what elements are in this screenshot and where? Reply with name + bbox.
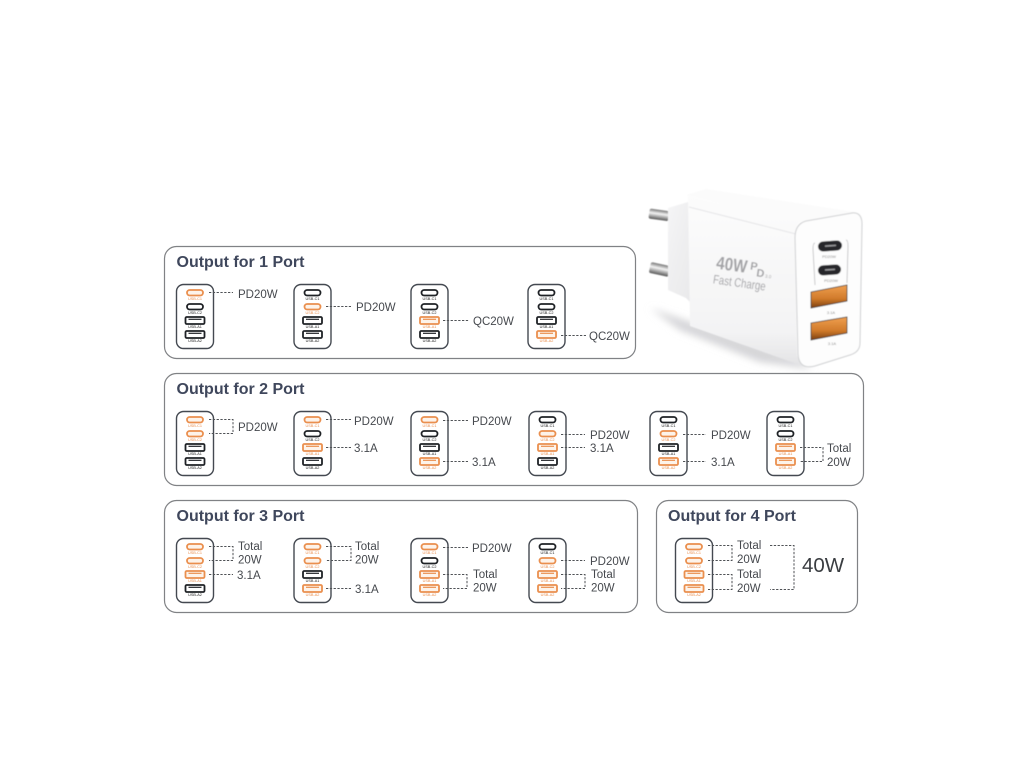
label: QC20W: [473, 316, 514, 328]
charger printed logo: [712, 253, 774, 294]
device: C1 A1 A2 active: USB-A1: [423, 579, 436, 583]
device: USB-C2 active: USB-A1: [306, 325, 319, 329]
device: C1 and C2 active: USB-A2: [188, 466, 202, 470]
connector: [443, 546, 468, 548]
connector: [326, 306, 351, 308]
charger crease: [689, 207, 796, 234]
panel: output for 3 port: [164, 500, 638, 612]
label: PD20W: [354, 416, 394, 428]
heading: Output for 1 Port: [176, 254, 305, 271]
device: USB-A2 active: USB-C1: [540, 297, 553, 301]
device: C1 and A2 active: USB-C1: [423, 424, 436, 428]
device: USB-C1 active: USB-C2: [188, 311, 202, 315]
label: 20W: [355, 554, 379, 566]
device: A1 and A2 active: USB-A1: [779, 452, 792, 456]
device: USB-A2 active: USB-A1: [540, 325, 553, 329]
charger pins: [648, 209, 671, 277]
device: A1 and A2 active: [767, 412, 804, 476]
bracket: [209, 546, 233, 560]
device: C1 C2 A1 active: [176, 538, 214, 602]
charger front face: [795, 213, 862, 367]
charger side face: [688, 196, 806, 367]
panel outline: [656, 500, 858, 612]
panel outline: [164, 500, 638, 612]
device: USB-C1 active: USB-C1: [188, 297, 202, 301]
label: PD20W: [590, 556, 630, 568]
label: Total: [355, 541, 379, 553]
device: USB-C2 active: USB-C2: [306, 311, 319, 315]
label: 20W: [473, 582, 497, 594]
device: C2 and A2 active: USB-C1: [662, 424, 675, 428]
device: C1 and A1 active: USB-A1: [306, 452, 319, 456]
charger product photo: [648, 189, 862, 369]
device: all ports active: [676, 538, 712, 602]
device: C1 and A2 active: USB-A1: [423, 452, 436, 456]
label: 3.1A: [590, 443, 614, 455]
device: C1 and A2 active: USB-C2: [423, 438, 436, 442]
device: all ports active: USB-A2: [687, 593, 701, 597]
device: C2 and A2 active: USB-A2: [662, 466, 675, 470]
label: Total: [238, 541, 262, 553]
device: C1 and A2 active: [411, 412, 448, 476]
connector: [443, 320, 469, 322]
device: USB-C2 active: [294, 284, 331, 348]
label: PD20W: [472, 543, 512, 555]
charger front ports: PD20W: [822, 254, 836, 259]
label: 3.1A: [354, 443, 378, 455]
label: 20W: [737, 583, 761, 595]
total bracket: [770, 546, 794, 590]
device: C2 A1 A2 active: USB-A1: [541, 579, 554, 583]
device: C1 C2 A1 active: USB-A2: [188, 593, 202, 597]
device: USB-C1 active: USB-A2: [188, 339, 202, 343]
total value: 40W: [802, 554, 845, 577]
charger printed logo: D: [756, 267, 765, 280]
device: C1 C2 A1 active: USB-C2: [188, 565, 202, 569]
device: C1 and A1 active: [294, 412, 331, 476]
panel: output for 2 port: [164, 374, 864, 486]
bracket: [708, 574, 732, 590]
label: 20W: [827, 457, 851, 469]
device: USB-A2 active: [528, 284, 565, 348]
label: Total: [737, 540, 761, 552]
device: USB-C2 active: USB-A2: [306, 339, 319, 343]
device: C1 A1 A2 active: USB-C1: [423, 551, 436, 555]
device: C2 and A2 active: USB-A1: [662, 452, 675, 456]
label: PD20W: [590, 430, 630, 442]
device: C2 A1 A2 active: [529, 538, 566, 602]
label: Total: [591, 569, 615, 581]
heading: Output for 3 Port: [176, 508, 305, 525]
device: C2 and A1 active: USB-C2: [541, 438, 554, 442]
device: C2 A1 A2 active: USB-A2: [541, 593, 554, 597]
device: C1 C2 A1 active: USB-C1: [188, 551, 202, 555]
device: all ports active: USB-A1: [687, 579, 701, 583]
panel: output for 4 port: [656, 500, 858, 612]
device: C2 and A2 active: USB-C2: [662, 438, 675, 442]
charger back plate: [668, 202, 700, 312]
device: C1 C2 A2 active: [294, 538, 331, 602]
device: C1 and A2 active: USB-A2: [423, 466, 436, 470]
charger top face: [686, 189, 855, 222]
connector: [209, 574, 233, 576]
label: 20W: [591, 582, 615, 594]
charger front ports: PD20W: [824, 278, 838, 283]
connector: [561, 560, 585, 562]
charger printed logo: Fast Charge: [712, 272, 767, 294]
charger front ports: 3.1A: [828, 341, 836, 346]
device: C2 and A1 active: [529, 412, 566, 476]
charger shadow: [650, 308, 812, 369]
device: C1 and C2 active: USB-C2: [188, 438, 202, 442]
label: QC20W: [589, 331, 630, 343]
device: C2 and A1 active: USB-C1: [541, 424, 554, 428]
label: PD20W: [356, 302, 396, 314]
connector: [326, 588, 351, 590]
label: 3.1A: [711, 457, 735, 469]
device: A1 and A2 active: USB-C1: [779, 424, 792, 428]
device: USB-A2 active: USB-C2: [540, 311, 553, 315]
device: A1 and A2 active: USB-C2: [779, 438, 792, 442]
charger printed logo: 40W: [715, 253, 749, 277]
device: C1 and A1 active: USB-A2: [306, 466, 319, 470]
device: C2 and A1 active: USB-A1: [541, 452, 554, 456]
label: 3.1A: [237, 570, 261, 582]
device: USB-A2 active: USB-A2: [540, 339, 553, 343]
device: C2 A1 A2 active: USB-C2: [541, 565, 554, 569]
device: C1 and A1 active: USB-C1: [306, 424, 319, 428]
label: 3.1A: [355, 584, 379, 596]
device: C1 A1 A2 active: [411, 538, 448, 602]
device: C1 A1 A2 active: USB-A2: [423, 593, 436, 597]
connectors: [443, 420, 468, 462]
device: C1 and A1 active: USB-C2: [306, 438, 319, 442]
bracket: [708, 546, 732, 560]
device: C1 and C2 active: [176, 412, 214, 476]
device: USB-A1 active: USB-C2: [423, 311, 436, 315]
connectors: [561, 434, 585, 448]
device: C1 and C2 active: USB-C1: [188, 424, 202, 428]
device: USB-A1 active: [411, 284, 448, 348]
label: Total: [827, 443, 851, 455]
device: C1 C2 A2 active: USB-C2: [306, 565, 319, 569]
connectors: [326, 420, 351, 448]
charger front ports: [811, 240, 848, 346]
device: C1 C2 A2 active: USB-C1: [306, 551, 319, 555]
device: all ports active: USB-C1: [687, 551, 701, 555]
bracket: [326, 546, 351, 560]
bracket: [800, 448, 823, 462]
device: C1 C2 A2 active: USB-A1: [306, 579, 319, 583]
device: USB-A1 active: USB-A2: [423, 339, 436, 343]
charger front ports: 3.1A: [827, 310, 835, 315]
label: 20W: [737, 554, 761, 566]
label: 20W: [238, 554, 262, 566]
device: C1 A1 A2 active: USB-C2: [423, 565, 436, 569]
connectors: [683, 434, 706, 462]
device: USB-C1 active: [176, 284, 214, 348]
panel outline: [164, 374, 864, 486]
label: PD20W: [472, 416, 512, 428]
label: 3.1A: [472, 457, 496, 469]
label: PD20W: [238, 289, 278, 301]
label: Total: [473, 569, 497, 581]
heading: Output for 2 Port: [176, 381, 305, 398]
device: USB-A1 active: USB-A1: [423, 325, 436, 329]
device: C1 C2 A1 active: USB-A1: [188, 579, 202, 583]
device: USB-C2 active: USB-C1: [306, 297, 319, 301]
device: C2 A1 A2 active: USB-C1: [541, 551, 554, 555]
device: C2 and A2 active: [650, 412, 687, 476]
label: PD20W: [238, 422, 278, 434]
charger printed logo: 3.0: [765, 274, 772, 279]
panel outline: [164, 246, 636, 358]
device: USB-A1 active: USB-C1: [423, 297, 436, 301]
device: C1 C2 A2 active: USB-A2: [306, 593, 319, 597]
bracket: [561, 574, 585, 588]
charger printed logo: P: [749, 260, 758, 273]
device: C2 and A1 active: USB-A2: [541, 466, 554, 470]
label: PD20W: [711, 430, 751, 442]
device: USB-C1 active: USB-A1: [188, 325, 202, 329]
device: A1 and A2 active: USB-A2: [779, 466, 792, 470]
device: all ports active: USB-C2: [687, 565, 701, 569]
bracket: [209, 420, 233, 434]
device: C1 and C2 active: USB-A1: [188, 452, 202, 456]
heading: Output for 4 Port: [668, 508, 797, 525]
panel: output for 1 port: [164, 246, 636, 358]
bracket: [443, 574, 467, 588]
label: Total: [737, 569, 761, 581]
connector: [561, 334, 586, 336]
connector: [209, 292, 233, 294]
